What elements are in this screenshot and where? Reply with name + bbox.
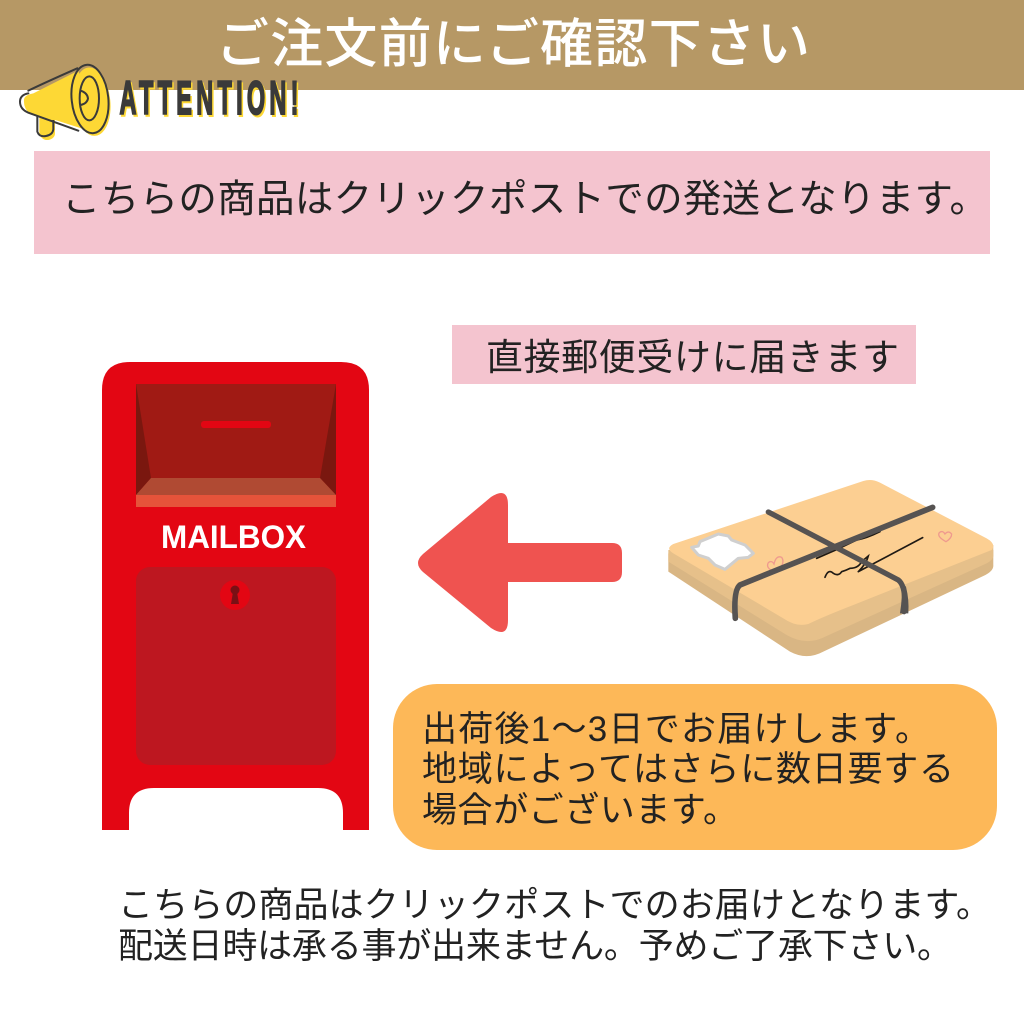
footer note: こちらの商品はクリックポストでのお届けとなります。 <box>118 886 991 925</box>
strings <box>735 507 933 618</box>
footer note <box>118 886 991 966</box>
stamp <box>692 534 753 569</box>
ATTENTION label: ATTENTION! <box>120 71 298 124</box>
handwriting <box>817 532 923 577</box>
callout: delivery time: 場合がございます。 <box>422 791 738 830</box>
panel: shipping notice: こちらの商品はクリックポストでの発送となります。 <box>62 178 988 221</box>
icon: stack of envelopes <box>668 480 993 656</box>
footer note: 配送日時は承る事が出来ません。予めご了承下さい。 <box>118 927 952 966</box>
ATTENTION label: ATTENTION! <box>121 73 300 126</box>
mailbox label: MAILBOX <box>161 519 307 555</box>
header banner <box>0 0 1024 90</box>
callout: delivery time <box>393 684 997 850</box>
panel: shipping notice <box>34 151 990 254</box>
title: ご注文前にご確認下さい <box>216 15 810 74</box>
icon: red mailbox <box>102 362 369 830</box>
icon: megaphone <box>20 63 114 140</box>
hearts <box>768 557 783 573</box>
panel: delivered to mailbox <box>452 325 916 384</box>
panel: delivered to mailbox: 直接郵便受けに届きます <box>486 337 899 378</box>
callout: delivery time: 出荷後1～3日でお届けします。 <box>422 710 930 749</box>
callout: delivery time: 地域によってはさらに数日要する <box>422 750 954 789</box>
arrow pointing left <box>418 493 622 632</box>
